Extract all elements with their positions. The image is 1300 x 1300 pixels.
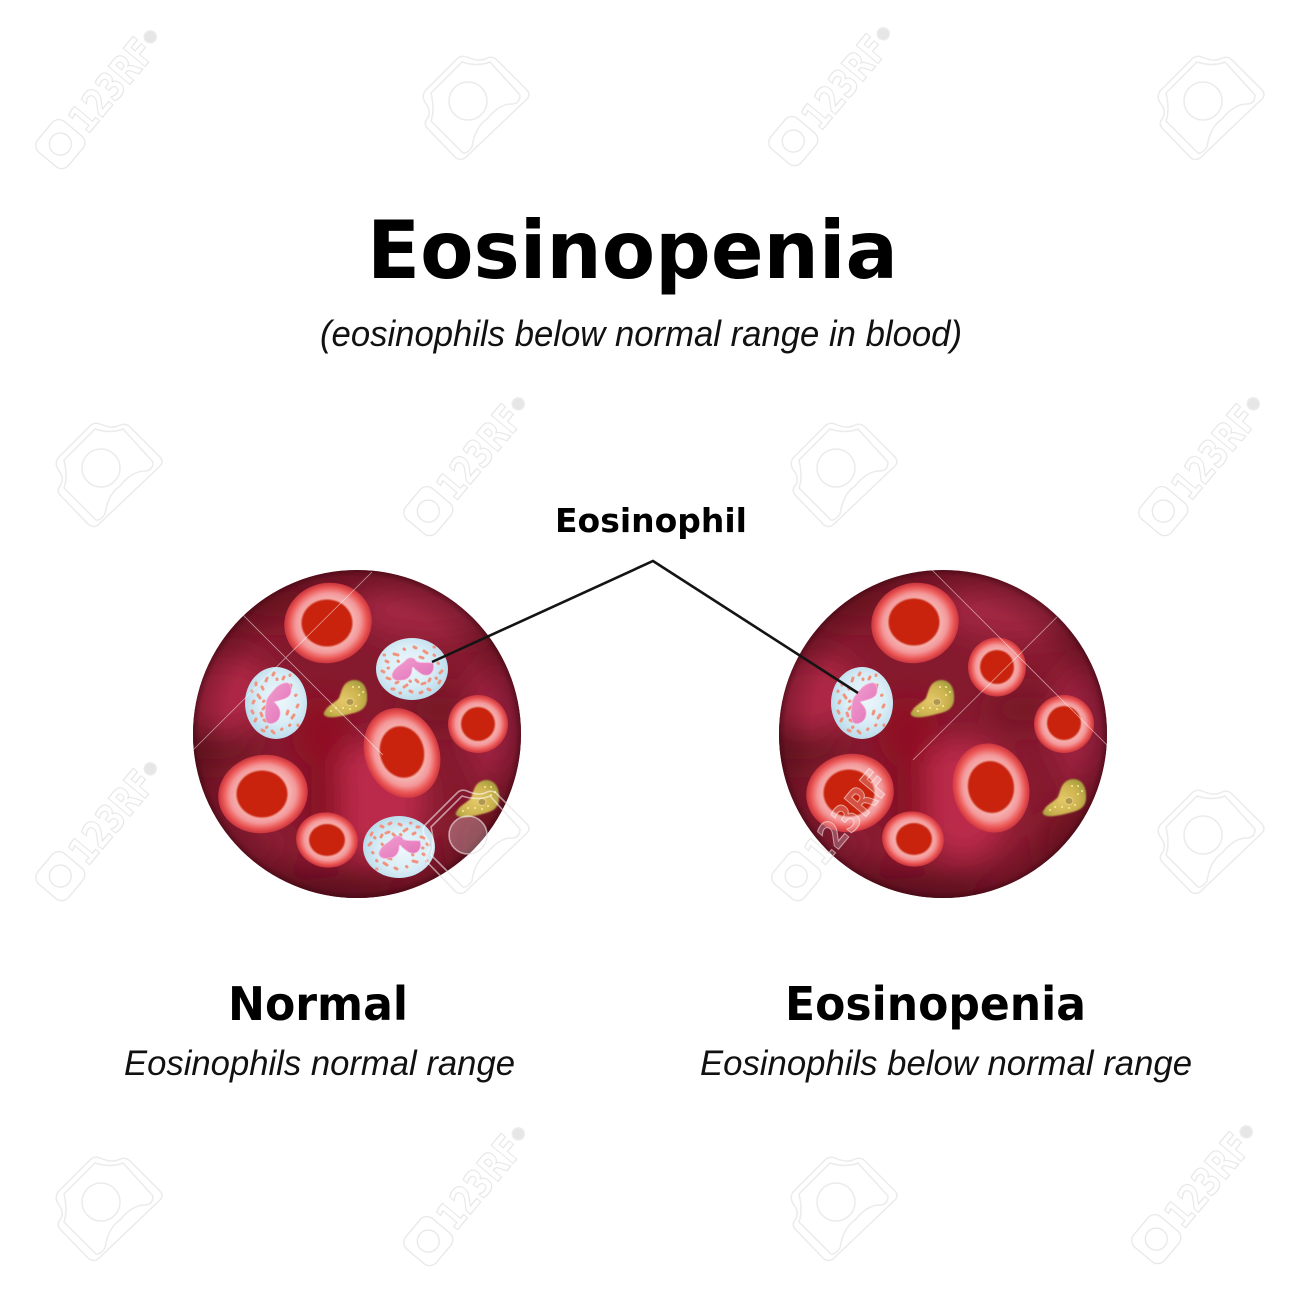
- red blood cell: [211, 746, 315, 842]
- red blood cell: [968, 638, 1026, 696]
- heading: eosinopenia: Eosinopenia: [785, 977, 1086, 1031]
- panel: eosinopenia blood circle: [779, 570, 1107, 898]
- red blood cell: [350, 696, 454, 810]
- caption: normal: Eosinophils normal range: [124, 1044, 515, 1083]
- platelet: [1043, 779, 1086, 816]
- platelet: [911, 680, 954, 717]
- red blood cell: [799, 746, 901, 840]
- heading: normal: Normal: [228, 977, 408, 1031]
- caption: eosinopenia: Eosinophils below normal range: [700, 1044, 1192, 1083]
- platelet: [324, 680, 367, 717]
- title: Eosinopenia: [367, 204, 898, 297]
- subtitle: (eosinophils below normal range in blood): [320, 313, 962, 354]
- eosinophil: [363, 816, 435, 878]
- red blood cell: [878, 807, 948, 871]
- red blood cell: [1034, 695, 1094, 753]
- red blood cell: [448, 695, 508, 753]
- eosinophil: [376, 638, 448, 700]
- panel: normal blood circle: [193, 570, 521, 898]
- red blood cell: [862, 573, 968, 673]
- red blood cell: [275, 573, 381, 673]
- eosinophil: [245, 667, 307, 739]
- label: Eosinophil: Eosinophil: [555, 501, 747, 540]
- red blood cell: [292, 808, 362, 872]
- red blood cell: [943, 735, 1039, 841]
- eosinophil: [831, 667, 893, 739]
- leader lines from label to eosinophils: [432, 561, 858, 693]
- platelet: [456, 780, 499, 817]
